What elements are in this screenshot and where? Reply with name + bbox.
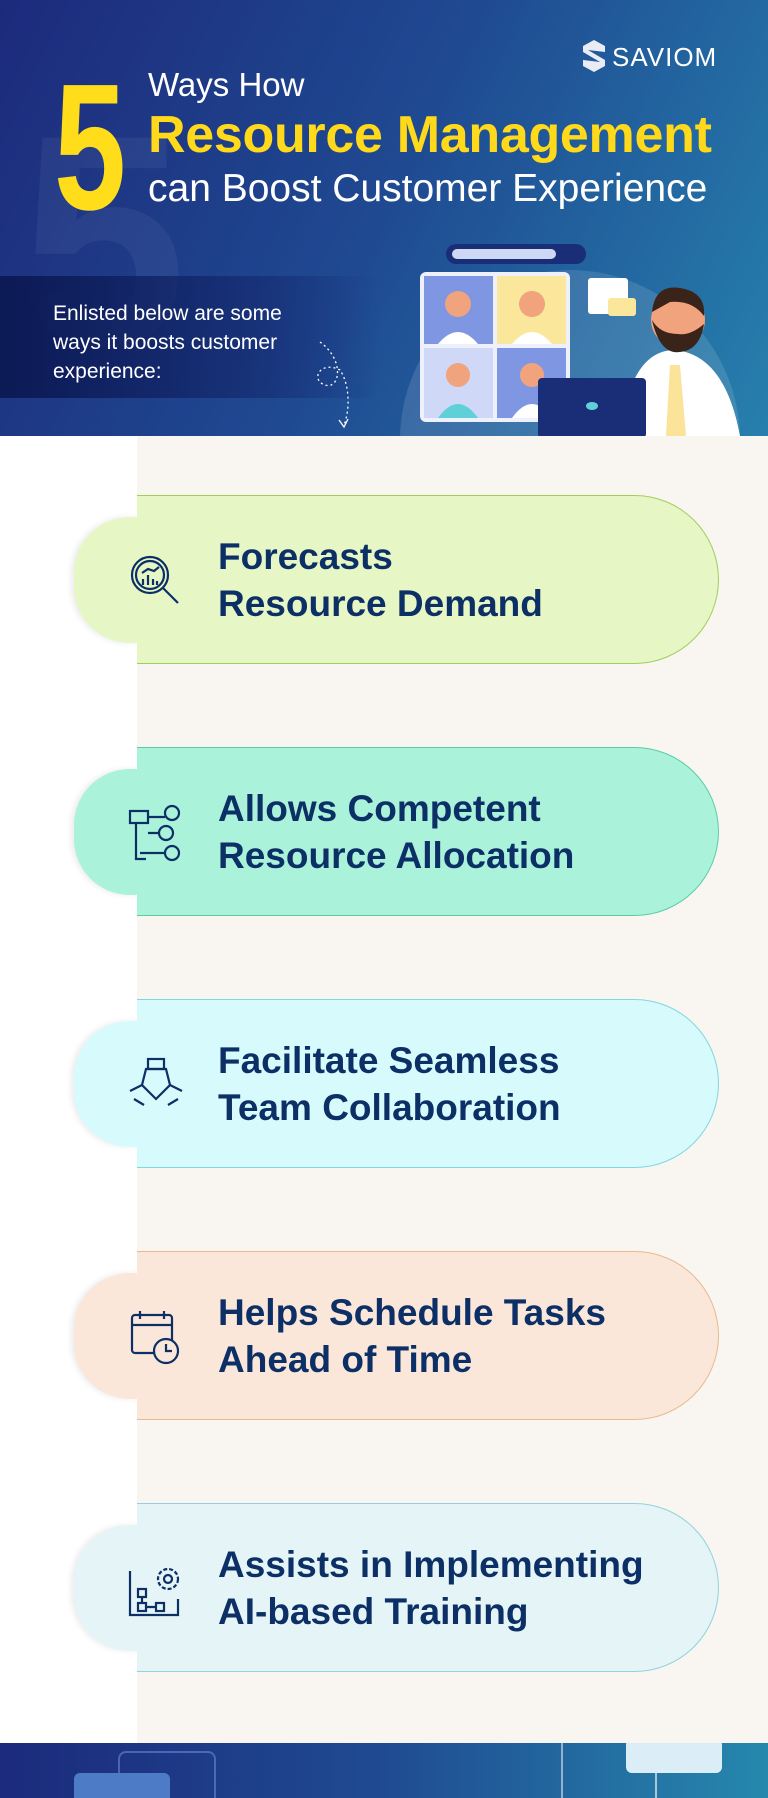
text: Facilitate Seamless <box>218 1040 559 1080</box>
text <box>218 788 574 876</box>
text: Assists in Implementing <box>218 1544 644 1584</box>
decorative big 5: 5 <box>20 72 187 408</box>
left white strip <box>0 436 137 1743</box>
card 5: Assists in Implementing AI-based Training <box>70 1503 719 1672</box>
icon: hands <box>130 1058 182 1106</box>
intro band <box>0 276 380 398</box>
header <box>0 0 768 436</box>
logo: SAVIOM: SAVIOM <box>612 42 717 72</box>
icon: gear diagram <box>128 1568 180 1616</box>
text: Forecasts <box>218 536 393 576</box>
icon: calendar clock <box>130 1311 180 1364</box>
icon: magnifier chart <box>130 556 179 604</box>
text: AI-based Training <box>218 1590 528 1632</box>
title text: Resource Management <box>148 106 712 164</box>
icon: allocation <box>128 804 180 862</box>
title text: Ways How <box>148 66 304 103</box>
text <box>218 1040 561 1128</box>
card 4: Helps Schedule Tasks Ahead of Time <box>70 1251 719 1420</box>
text: Team Collaboration <box>218 1086 561 1128</box>
intro text: Enlisted below are some ways it boosts customer experience: <box>53 302 282 383</box>
title number 5: 5 <box>54 47 126 248</box>
card 3: Facilitate Seamless Team Collaboration <box>70 999 719 1168</box>
text: Resource Demand <box>218 582 543 624</box>
card 2: Allows Competent Resource Allocation <box>70 747 719 916</box>
card 1: Forecasts Resource Demand <box>70 495 719 664</box>
title text <box>148 66 712 210</box>
illustration: video call <box>400 244 740 436</box>
arrow: dotted curve <box>317 342 349 428</box>
text: Resource Allocation <box>218 834 574 876</box>
text: Allows Competent <box>218 788 541 828</box>
title text: can Boost Customer Experience <box>148 167 707 210</box>
text: Ahead of Time <box>218 1338 472 1380</box>
text <box>218 1292 606 1380</box>
text: Helps Schedule Tasks <box>218 1292 606 1332</box>
footer <box>0 1743 768 1798</box>
text <box>218 1544 644 1632</box>
text <box>218 536 543 624</box>
